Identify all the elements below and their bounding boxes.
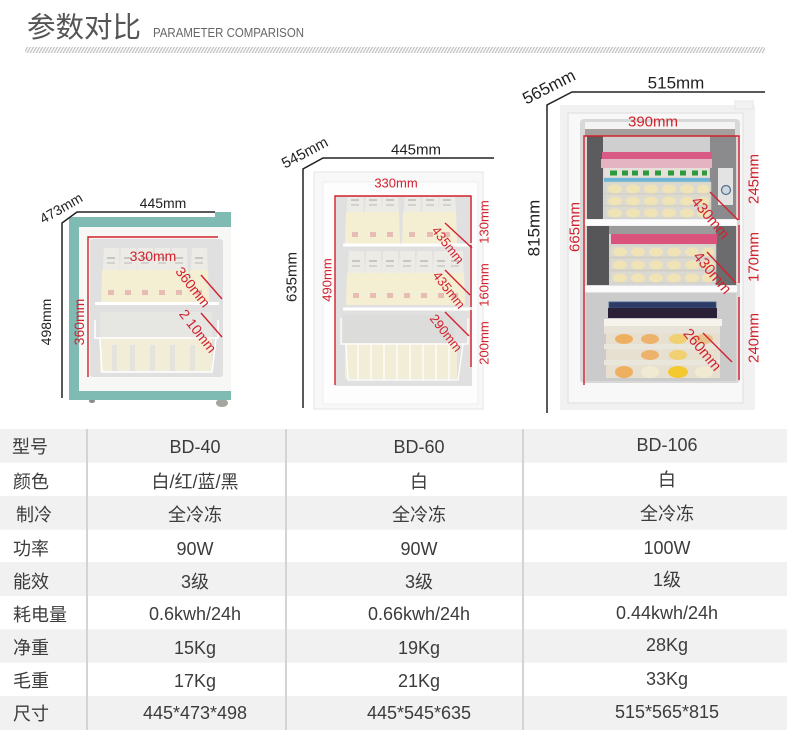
- shelf BD-40: [95, 302, 219, 305]
- label: 200mm: 200mm: [476, 321, 492, 365]
- fridge body BD-40: [69, 212, 231, 407]
- row: 尺寸: [13, 702, 719, 724]
- label: 435mm upper: 435mm: [429, 223, 467, 267]
- parameter table: [0, 429, 787, 730]
- row: 型号: 型号: [12, 437, 48, 457]
- row: 制冷: 全冷冻: [168, 505, 222, 525]
- milk bags middle shelf: [346, 251, 465, 305]
- label: 260mm: 260mm: [679, 325, 725, 375]
- label: 160mm: 160mm: [476, 263, 492, 307]
- red measure lines BD-106: [584, 136, 739, 385]
- row: 毛重: 毛重: [13, 671, 49, 691]
- black dimension lines BD-60: [303, 158, 494, 408]
- label: 130mm: 130mm: [476, 200, 492, 244]
- food trays upper shelf: [601, 152, 712, 218]
- red measure lines BD-60: [335, 196, 472, 385]
- row: 耗电量: 0.66kwh/24h: [368, 604, 470, 624]
- table row stripes: [0, 429, 787, 730]
- label: 360mm inner height: 360mm: [71, 299, 87, 345]
- label: 473mm depth: 473mm: [37, 189, 85, 227]
- row: 耗电量: [13, 603, 718, 625]
- row: 尺寸: 445*473*498: [143, 703, 247, 723]
- row: 毛重: 17Kg: [174, 671, 216, 691]
- row: 型号: BD-106: [636, 435, 698, 455]
- product: BD-60 fridge diagram: [279, 134, 494, 409]
- label: 665mm: 665mm: [566, 202, 584, 252]
- row: 制冷: 全冷冻: [392, 505, 446, 525]
- row: 颜色: 白: [410, 472, 428, 492]
- shelves BD-60: [343, 245, 470, 309]
- row: 耗电量: 耗电量: [13, 605, 67, 625]
- label: 430mm lower: 430mm: [689, 248, 735, 298]
- label: 390mm: 390mm: [628, 114, 678, 130]
- row: 型号: BD-40: [169, 437, 221, 457]
- row: 净重: 净重: [13, 638, 49, 658]
- red measure lines BD-40: [88, 237, 222, 377]
- row: 能效: 1级: [653, 570, 681, 590]
- label: 565mm depth: 565mm: [519, 66, 579, 108]
- row: 功率: 100W: [643, 538, 691, 558]
- label: 515mm width: 515mm: [648, 74, 704, 92]
- row: 制冷: [16, 504, 694, 525]
- shelves BD-106: [585, 222, 737, 289]
- black dimension lines BD-106: [547, 92, 765, 413]
- milk bags upper shelf: [101, 248, 209, 302]
- row: 净重: 15Kg: [174, 638, 216, 658]
- food trays lower shelf: [604, 302, 722, 378]
- row: 功率: 90W: [400, 539, 438, 559]
- heading: 参数对比: 参数对比: [27, 12, 141, 44]
- label: 290mm: 290mm: [427, 311, 465, 355]
- label: 490mm: 490mm: [320, 258, 334, 302]
- row: 颜色: 白/红/蓝/黑: [151, 472, 239, 492]
- label: 545mm depth: 545mm: [279, 134, 331, 172]
- row: 功率: 90W: [176, 539, 214, 559]
- row: 制冷: 制冷: [16, 505, 52, 525]
- row: 能效: 3级: [181, 572, 209, 592]
- row: 净重: 19Kg: [398, 638, 440, 658]
- row: 毛重: 33Kg: [646, 669, 688, 689]
- row: 能效: 能效: [13, 572, 49, 592]
- row: 功率: 功率: [13, 539, 49, 559]
- label: 240mm: 240mm: [746, 313, 762, 363]
- row: 尺寸: 515*565*815: [615, 702, 719, 722]
- row: 能效: 3级: [405, 572, 433, 592]
- row: 能效: [13, 570, 681, 592]
- label: 635mm height: 635mm: [284, 252, 300, 302]
- bags and basket BD-60: [341, 315, 468, 380]
- label: 330mm: 330mm: [374, 176, 418, 190]
- row: 颜色: 白: [658, 470, 676, 490]
- row: 毛重: 21Kg: [398, 671, 440, 691]
- label: 498mm height: 498mm: [38, 299, 54, 345]
- label: 815mm height: 815mm: [524, 200, 544, 256]
- label: 445mm width: 445mm: [391, 142, 441, 158]
- label: 435mm lower: 435mm: [430, 268, 468, 312]
- wire basket BD-40: [95, 320, 218, 372]
- row: 毛重: [13, 669, 688, 691]
- row: 型号: BD-60: [393, 437, 445, 457]
- row: 耗电量: 0.44kwh/24h: [616, 603, 718, 623]
- row: 耗电量: 0.6kwh/24h: [149, 604, 241, 624]
- label: 330mm: 330mm: [130, 248, 176, 264]
- label: 170mm: 170mm: [746, 232, 762, 282]
- row: 功率: [13, 538, 691, 559]
- title block: [27, 12, 304, 44]
- row: 净重: 28Kg: [646, 635, 688, 655]
- row: 尺寸: 尺寸: [13, 704, 49, 724]
- fridge body BD-60: [314, 172, 483, 409]
- food trays middle shelf: [610, 234, 717, 283]
- subheading: parameter comparison: PARAMETER COMPARISON: [153, 25, 304, 40]
- row: 颜色: [13, 470, 676, 492]
- table column dividers: [86, 429, 524, 730]
- milk bags top shelf: [345, 197, 457, 244]
- milk bags in basket: [100, 312, 212, 371]
- control box: [718, 168, 733, 205]
- row: 制冷: 全冷冻: [640, 504, 694, 524]
- label: 430mm upper: 430mm: [687, 193, 733, 243]
- row: 尺寸: 445*545*635: [367, 703, 471, 723]
- fridge body BD-106: [560, 101, 755, 410]
- row: 净重: [13, 635, 688, 658]
- label: 445mm width: 445mm: [140, 195, 186, 211]
- product: BD-106 fridge diagram: [519, 66, 765, 413]
- row: 型号: [12, 435, 698, 457]
- label: 360mm depth: 360mm: [172, 264, 214, 310]
- label: 210mm depth: 2 10mm: [176, 306, 220, 356]
- row: 颜色: 颜色: [13, 472, 49, 492]
- product: BD-40 fridge diagram: [37, 189, 231, 407]
- black dimension lines BD-40: [62, 212, 215, 398]
- label: 245mm: 245mm: [746, 154, 762, 204]
